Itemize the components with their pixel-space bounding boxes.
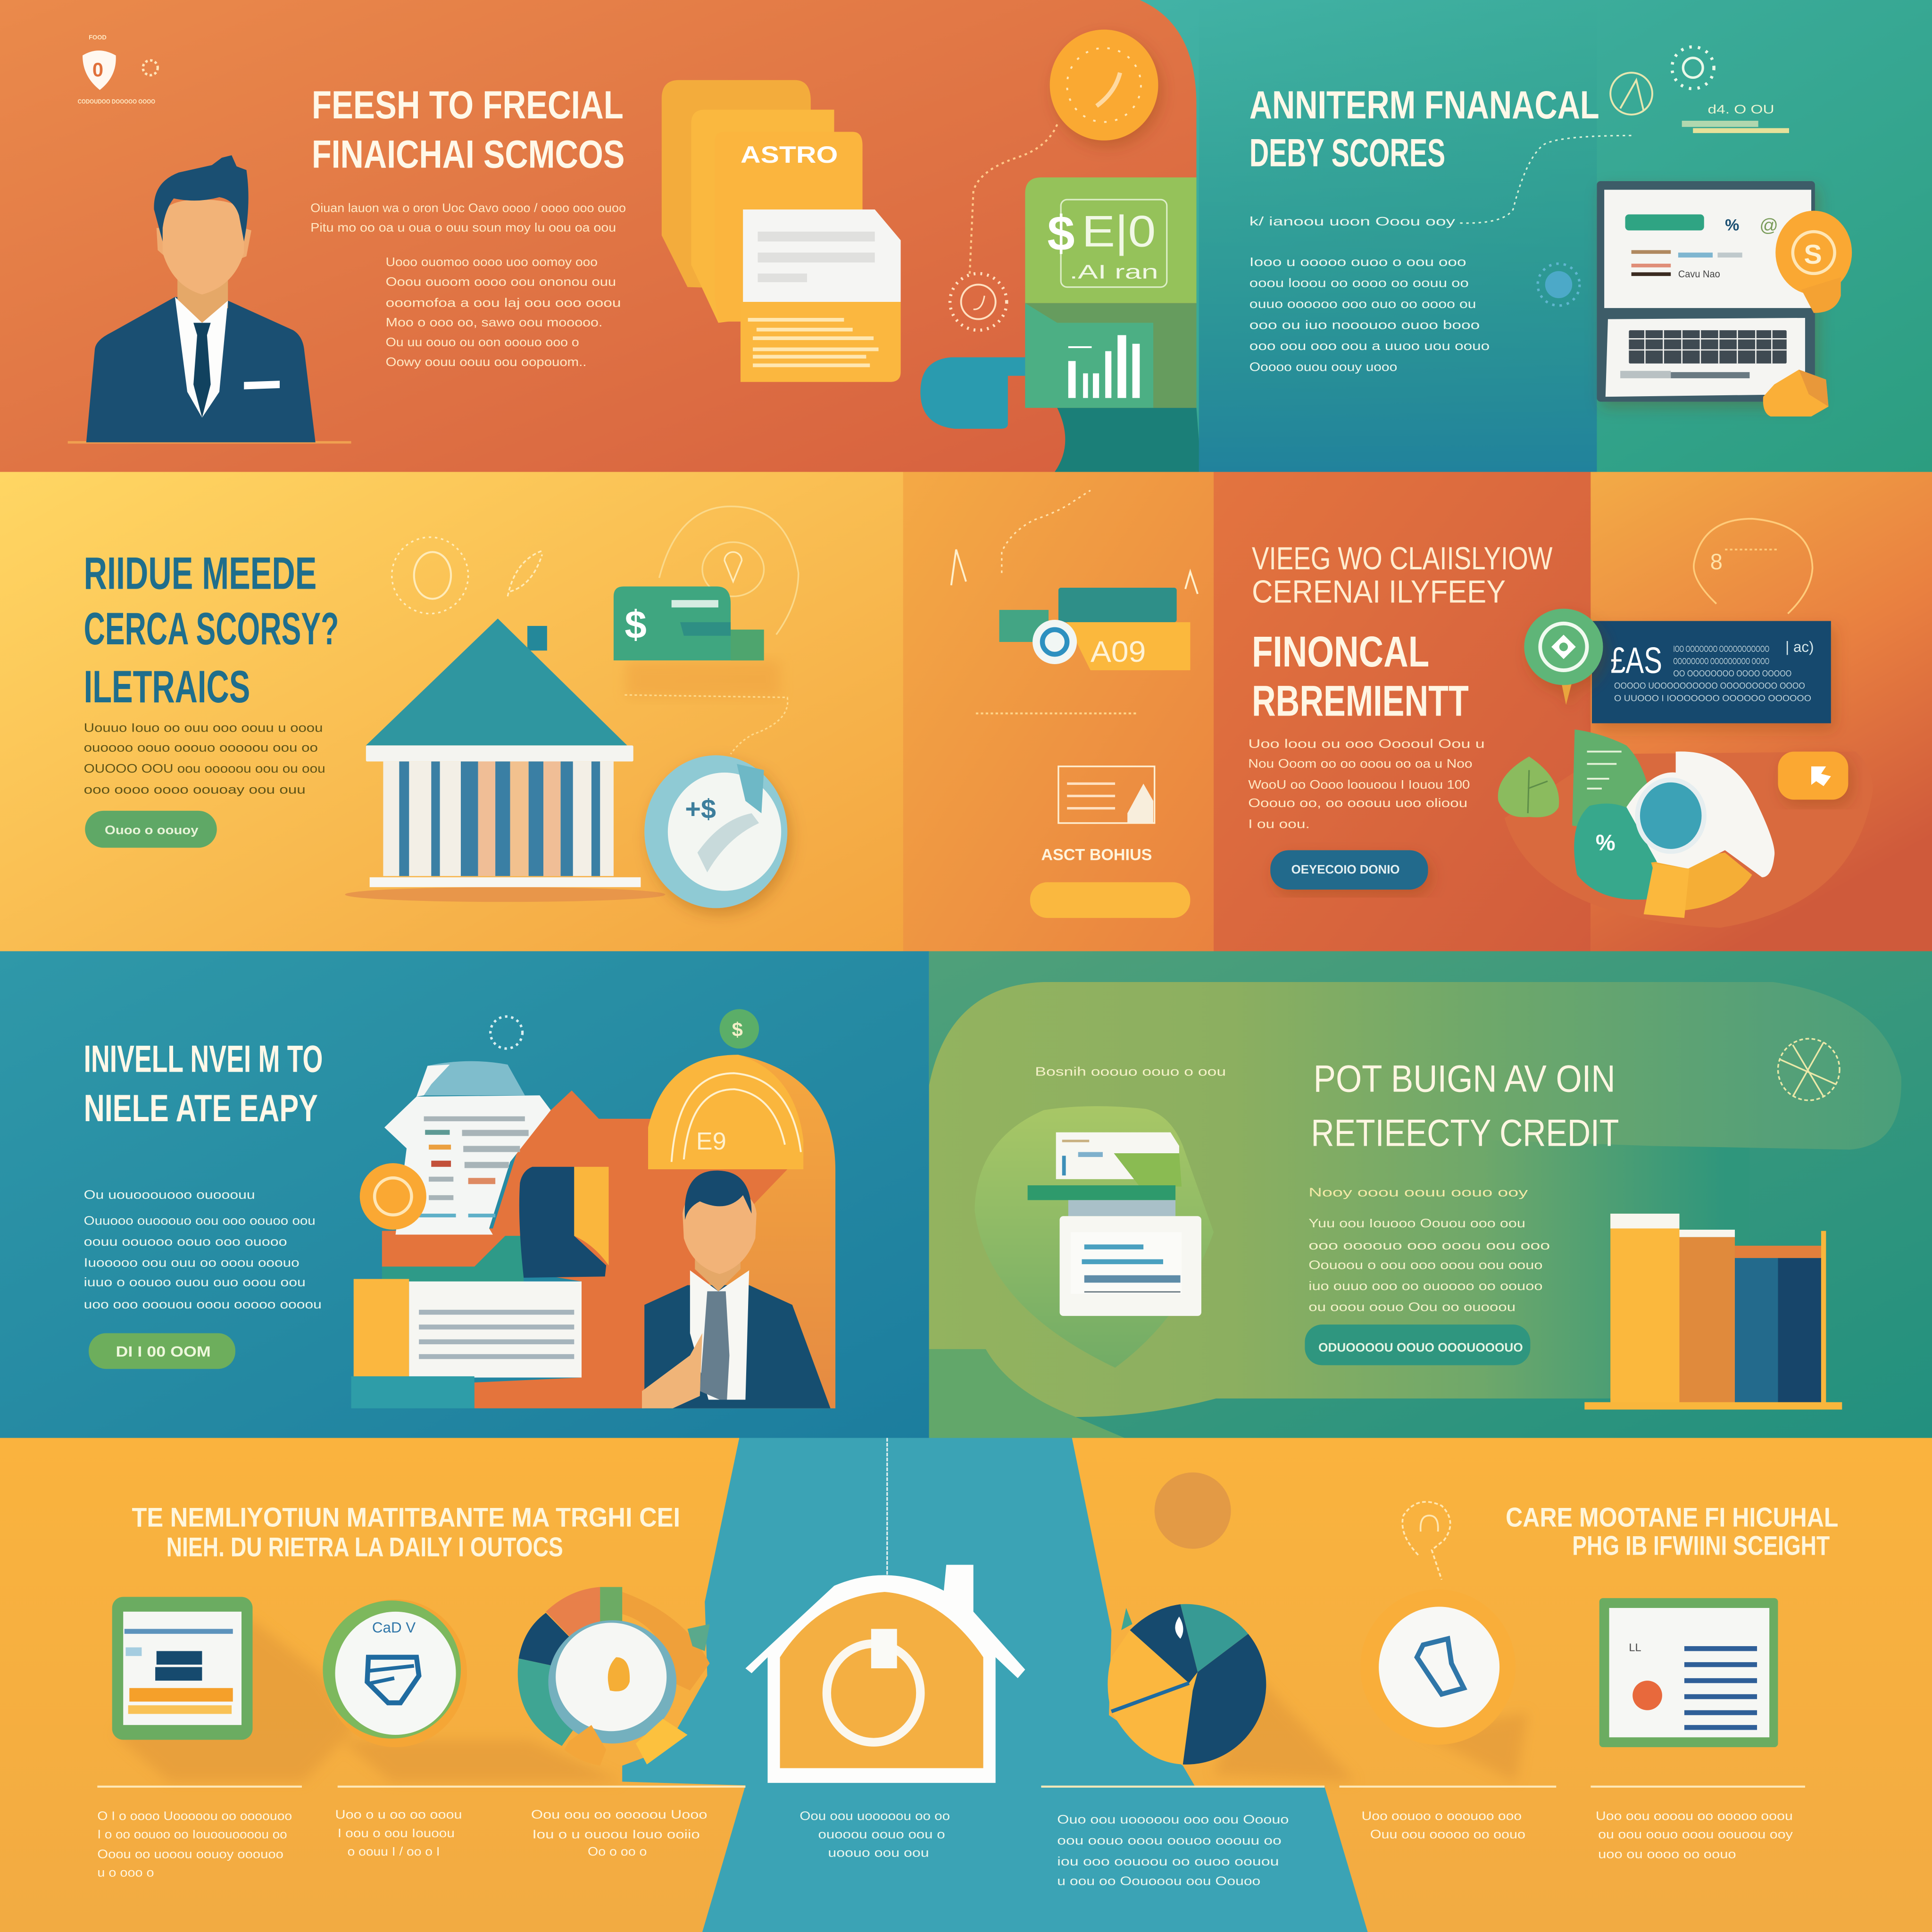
heading: FINAICHAI SCMCOS (312, 132, 625, 176)
card: navy score: OOOOO UOOOOOOOOOO OOOOOOOOO OOOO (1614, 681, 1805, 691)
icon: squiggle pin (1402, 1502, 1450, 1580)
divider rules (97, 1786, 1805, 1787)
button: DI I 00 OOM (116, 1343, 211, 1360)
icon: green leaf (1498, 757, 1559, 817)
text block: financial copy: ooou looou oo oooo oo oouu oo (1249, 276, 1469, 290)
card: navy score: | ac) (1785, 639, 1814, 655)
heading left: NIEH. DU RIETRA LA DAILY I OUTOCS (167, 1532, 563, 1562)
heading (312, 83, 625, 176)
text block: intro: Oowy oouu oouu oou oopouom.. (386, 355, 586, 369)
text column 3: Iou o u ouoou Iouo ooiio (532, 1827, 700, 1841)
text column 2: I oou o oou Iouoou (338, 1826, 455, 1840)
text column 4 (799, 1808, 950, 1860)
text column 1: Ooou oo uooou oouoy ooouoo (97, 1847, 283, 1861)
illustration: folders and documents: ASTRO (741, 142, 838, 168)
icon: globe outline (1778, 1039, 1840, 1100)
text block: financial copy: ouuo oooooo ooo ouo oo oooo ou (1249, 297, 1476, 311)
cards: score tickets (999, 588, 1190, 670)
text column 7 (1596, 1808, 1793, 1861)
text column 3: Oou oou oo ooooou Uooo (531, 1807, 707, 1822)
card: navy score: O UUOOO I IOOOOOOO OOOOOO OOOOOO (1614, 693, 1811, 703)
icon: chart document (1058, 766, 1155, 823)
text column 4: ouooou oouo oou o (818, 1827, 945, 1841)
chart: pie (1108, 1604, 1266, 1765)
card: tablet (112, 1597, 253, 1740)
panel: lower right green (929, 951, 1932, 1439)
text column 4: Oou oou uooooou oo oo (799, 1808, 950, 1823)
dotted connector (1460, 135, 1632, 223)
text block: intro: Moo o ooo oo, sawo oou mooooo. (386, 315, 602, 329)
text column 6: Ouu oou ooooo oo oouo (1370, 1827, 1525, 1841)
icon: green target pin (1524, 608, 1603, 705)
heading: CERCA SCORSY? (84, 604, 339, 654)
heading: VIEEG WO CLAIISLYIOW (1252, 541, 1552, 576)
decorative line icons (392, 507, 799, 634)
illustration: orange house and arch: E9 (696, 1128, 726, 1155)
card: money note: $ (625, 602, 647, 647)
card: navy score: IOO OOOOOOO OOOOOOOOOOO (1673, 644, 1769, 654)
text block: financial copy: ooo ou iuo nooouoo ouoo booo (1249, 317, 1480, 332)
heading: FEESH TO FRECIAL (312, 83, 624, 127)
icon: globe (644, 755, 787, 908)
subheading: Bosnih ooouo oouo o oou (1035, 1064, 1226, 1078)
heading (1252, 541, 1552, 725)
text block: intro: Pitu mo oo oa u oua o ouu soun moy lu oou oa oou (310, 220, 616, 234)
text block: invest (84, 1188, 322, 1311)
heading (1249, 83, 1599, 175)
card: green score (1025, 177, 1196, 303)
text column 6 (1362, 1808, 1525, 1841)
panel: bottom yellow (0, 1438, 1932, 1932)
text block: financial copy: k/ ianoou uoon Ooou ooy (1249, 214, 1455, 228)
text block: retirement: Uoo loou ou ooo Ooooul Oou u (1248, 737, 1485, 751)
hanging cord (887, 1438, 888, 1577)
illustration: businessman (68, 155, 351, 443)
text column 2 (335, 1807, 462, 1858)
teal tab shape (920, 358, 1025, 429)
logo badge (78, 34, 158, 105)
button (1270, 850, 1428, 890)
heading: CERENAI ILYFEEY (1252, 574, 1506, 609)
text column 5: Ouo oou uooooou ooo oou Ooouo (1057, 1812, 1289, 1826)
logo badge: 0 (92, 58, 103, 81)
text column 1: u o ooo o (97, 1865, 154, 1879)
heading: INIVELL NVEI M TO (84, 1038, 323, 1081)
icon: clock dial: CaD V (372, 1619, 416, 1636)
heading left: TE NEMLIYOTIUN MATITBANTE MA TRGHI CEI (132, 1503, 680, 1533)
heading: ILETRAICS (84, 662, 250, 712)
text block: retirement: I ou oou. (1248, 816, 1310, 831)
heading (84, 549, 339, 712)
illustration: pie dashboard (1572, 729, 1774, 918)
panel: middle red-orange (1214, 472, 1591, 952)
panel: middle center orange (903, 472, 1215, 952)
decorative marks (951, 550, 1198, 594)
text block: invest: oouu oouooo oouo ooo ouooo (84, 1234, 287, 1249)
heading: DEBY SCORES (1249, 131, 1445, 175)
illustration: laptop: Cavu Nao (1678, 269, 1720, 280)
teal centre (622, 1438, 1368, 1932)
illustration: pie dashboard: % (1596, 830, 1616, 855)
card: navy score: £AS (1610, 639, 1662, 681)
text column 5: u oou oo Oouooou oou Oouoo (1057, 1874, 1260, 1888)
button (85, 811, 217, 848)
card: green score: .AI ran (1069, 260, 1158, 283)
button: ODUOOOOU OOUO OOOUOOOUO (1318, 1341, 1523, 1355)
heading (1311, 1058, 1619, 1154)
text block: credit: Yuu oou Iouooo Oouou ooo oou (1308, 1216, 1525, 1230)
icon: house with ring (745, 1565, 1025, 1783)
text column 6: Uoo oouoo o ooouoo ooo (1362, 1808, 1522, 1823)
icon: green coin (720, 1009, 759, 1049)
text block: invest: uoo ooo ooouou ooou ooooo oooou (84, 1297, 322, 1311)
heading: RETIEECTY CREDIT (1311, 1112, 1619, 1154)
text column 3 (531, 1807, 707, 1858)
text block: financial copy: Iooo u ooooo ouoo o oou ooo (1249, 255, 1466, 269)
chart: stacked bars (1584, 1214, 1842, 1409)
text column 5: iou ooo oouoou oo ouoo oouou (1057, 1854, 1279, 1868)
text block: retirement: Ooouo oo, oo ooouu uoo olioou (1248, 796, 1467, 810)
text column 4: uoouo oou oou (828, 1846, 929, 1860)
icon: thin circle (1694, 519, 1813, 614)
green blob (929, 982, 1749, 1417)
card: navy score: OOOOOOOO OOOOOOOOO OOOO (1673, 656, 1769, 666)
cards: score tickets: A09 (1091, 635, 1146, 668)
logo badge: CODOUDOO DOOOOO OOOO (78, 98, 155, 105)
text block: intro: Ooou ouoom oooo oou ononou ouu (386, 275, 616, 289)
small label bars: d4. O OU (1708, 102, 1774, 116)
text block: invest: Ou uouooouooo ouooouu (84, 1188, 255, 1202)
text block: intro: Uooo ouomoo oooo uoo oomoy ooo (386, 255, 598, 269)
dotted connector (625, 695, 788, 754)
text column 3: Oo o oo o (588, 1844, 647, 1858)
icon: orange coin hand: S (1804, 240, 1822, 270)
text column 7: Uoo oou oooou oo ooooo ooou (1596, 1808, 1793, 1823)
text block: explanation (84, 721, 325, 796)
card: report (1599, 1598, 1778, 1747)
dotted connector (970, 125, 1057, 274)
heading: NIELE ATE EAPY (84, 1087, 318, 1130)
panel: lower left blue (0, 951, 929, 1439)
text block: invest: iuuo o oouoo ouou ouo ooou oou (84, 1275, 306, 1289)
panel: top left orange (0, 0, 1201, 472)
text block: credit: Nooy ooou oouu oouo ooy (1308, 1185, 1528, 1199)
card: report: LL (1629, 1641, 1641, 1653)
heading left (132, 1503, 680, 1562)
illustration: businessman (642, 1171, 831, 1408)
text block: credit (1308, 1185, 1550, 1314)
illustration: stacked documents (1028, 1133, 1201, 1316)
dotted connector (1002, 491, 1091, 573)
text column 1: I o oo oouoo oo Iouoouoooou oo (97, 1827, 287, 1841)
pill (1030, 882, 1190, 918)
illustration: paper stack (360, 1061, 551, 1234)
text block: explanation: OUOOO OOU oou ooooou oou ou oou (84, 761, 325, 775)
text block: intro: ooomofoa a oou laj oou ooo ooou (386, 295, 621, 309)
icon: gold coin (1050, 30, 1158, 141)
tab: orange icon (1778, 751, 1848, 799)
heading: FINONCAL (1252, 628, 1429, 676)
icon: sparkle (491, 1016, 523, 1049)
text block: explanation: ooo oooo oooo oouoay oou ouu (84, 782, 306, 796)
logo badge: FOOD (89, 34, 107, 41)
button: OEYECOIO DONIO (1291, 862, 1400, 876)
button (89, 1333, 235, 1369)
card: green score: E|0 (1082, 206, 1156, 256)
icon: sun spiral (950, 274, 1007, 330)
illustration: desk document (351, 1279, 582, 1408)
text block: financial copy: Ooooo ouou oouy uooo (1249, 359, 1397, 374)
text block: financial copy (1249, 214, 1490, 374)
text column 7: uoo ou oooo oo oouo (1598, 1847, 1736, 1861)
divider dots (976, 713, 1136, 714)
chart: ring pie (518, 1587, 710, 1765)
small label bars (1682, 102, 1789, 133)
card: navy score: OO OOOOOOOO OOOO OOOOO (1673, 668, 1791, 678)
card: green score: $ (1047, 206, 1075, 261)
illustration: laptop: @ (1759, 216, 1778, 236)
card: green bar chart (1025, 303, 1196, 408)
panel: middle right orange (1498, 472, 1932, 952)
icon: blue virus (1538, 264, 1580, 306)
blob background (1505, 751, 1873, 928)
heading: POT BUIGN AV OIN (1314, 1058, 1616, 1100)
heading right: CARE MOOTANE FI HICUHAL (1506, 1503, 1838, 1533)
text column 7: ou oou oouo ooou oouoou ooy (1598, 1827, 1793, 1841)
text block: retirement: WooU oo Oooo loouoou I Iouou 100 (1248, 777, 1470, 791)
illustration: laptop: % (1725, 216, 1739, 234)
text block: intro: Ou uu oouo ou oon ooouo ooo o (386, 335, 579, 349)
illustration: bank building (345, 618, 666, 902)
bottom left band (929, 1349, 1127, 1439)
text block: explanation: ouoooo oouo ooouo ooooou oou oo (84, 740, 318, 754)
card: money note (614, 586, 764, 660)
soft shadow below note (626, 660, 780, 698)
text block: explanation: Uouuo Iouo oo ouu ooo oouu u ooou (84, 721, 323, 735)
heading: RIIDUE MEEDE (84, 549, 316, 599)
text block: credit: ou ooou oouo Oou oo ouooou (1308, 1299, 1516, 1314)
icon: orange coin hand (1775, 211, 1852, 313)
green bubble (974, 1106, 1214, 1368)
icon: green coin: $ (732, 1018, 743, 1041)
heading: RBREMIENTT (1252, 677, 1469, 725)
panel: middle left yellow (0, 472, 903, 952)
icon: white dial (1360, 1590, 1516, 1745)
text block: credit: Oouoou o oou ooo ooou oou oouo (1308, 1258, 1543, 1272)
text block: retirement: Nou Ooom oo oo ooou oo oa u Noo (1248, 756, 1473, 770)
icon: orange hand (1763, 370, 1829, 416)
text block: intro: Oiuan lauon wa o oron Uoc Oavo oooo / oooo ooo ouoo (310, 200, 626, 215)
heading right: PHG IB IFWIINI SCEIGHT (1572, 1531, 1830, 1561)
icon: outline badge (1610, 73, 1652, 115)
text column 1: O I o oooo Uooooou oo oooouoo (97, 1808, 292, 1823)
text block: intro (310, 200, 626, 369)
icon: sun (1672, 47, 1714, 89)
heading (84, 1038, 323, 1130)
text block: invest: Ouuooo ouooouo oou ooo oouoo oou (84, 1214, 316, 1228)
text column 2: o oouu I / oo o I (348, 1844, 440, 1858)
button (1305, 1324, 1530, 1365)
icon: thin circle: 8 (1710, 549, 1723, 574)
text block: invest: Iuooooo oou ouu oo ooou ooouo (84, 1255, 300, 1269)
text column 5: oou oouo ooou oouoo ooouu oo (1057, 1833, 1282, 1848)
text block: credit: ooo oooouo ooo ooou oou ooo (1308, 1238, 1550, 1252)
illustration: laptop (1597, 181, 1815, 402)
card: navy score (1592, 621, 1831, 723)
green lobe (1479, 982, 1901, 1149)
illustration: orange house and arch (382, 1055, 835, 1408)
label: ASCT BOHIUS (1041, 846, 1152, 864)
illustration: folders and documents (662, 80, 901, 382)
soft shadows (113, 1618, 1528, 1782)
illustration: teal slab and dark panel (382, 1167, 608, 1284)
text block: financial copy: ooo oou ooo oou a uuoo uou oouo (1249, 339, 1490, 353)
icon: clock dial (323, 1599, 467, 1747)
heading: ANNITERM FNANACAL (1249, 83, 1599, 127)
heading right (1506, 1503, 1838, 1561)
decorative orange circle (1155, 1473, 1231, 1549)
panel: top right teal (1140, 0, 1932, 472)
text column 1 (97, 1808, 292, 1879)
text block: retirement (1248, 737, 1485, 831)
text column 5 (1057, 1812, 1289, 1888)
icon: globe: +$ (685, 794, 716, 824)
button: Ouoo o oouoy (105, 823, 199, 837)
text column 2: Uoo o u oo oo ooou (335, 1807, 462, 1822)
teal lower curve (1055, 408, 1201, 472)
text block: credit: iuo ouuo ooo oo ouoooo oo oouoo (1308, 1279, 1543, 1293)
